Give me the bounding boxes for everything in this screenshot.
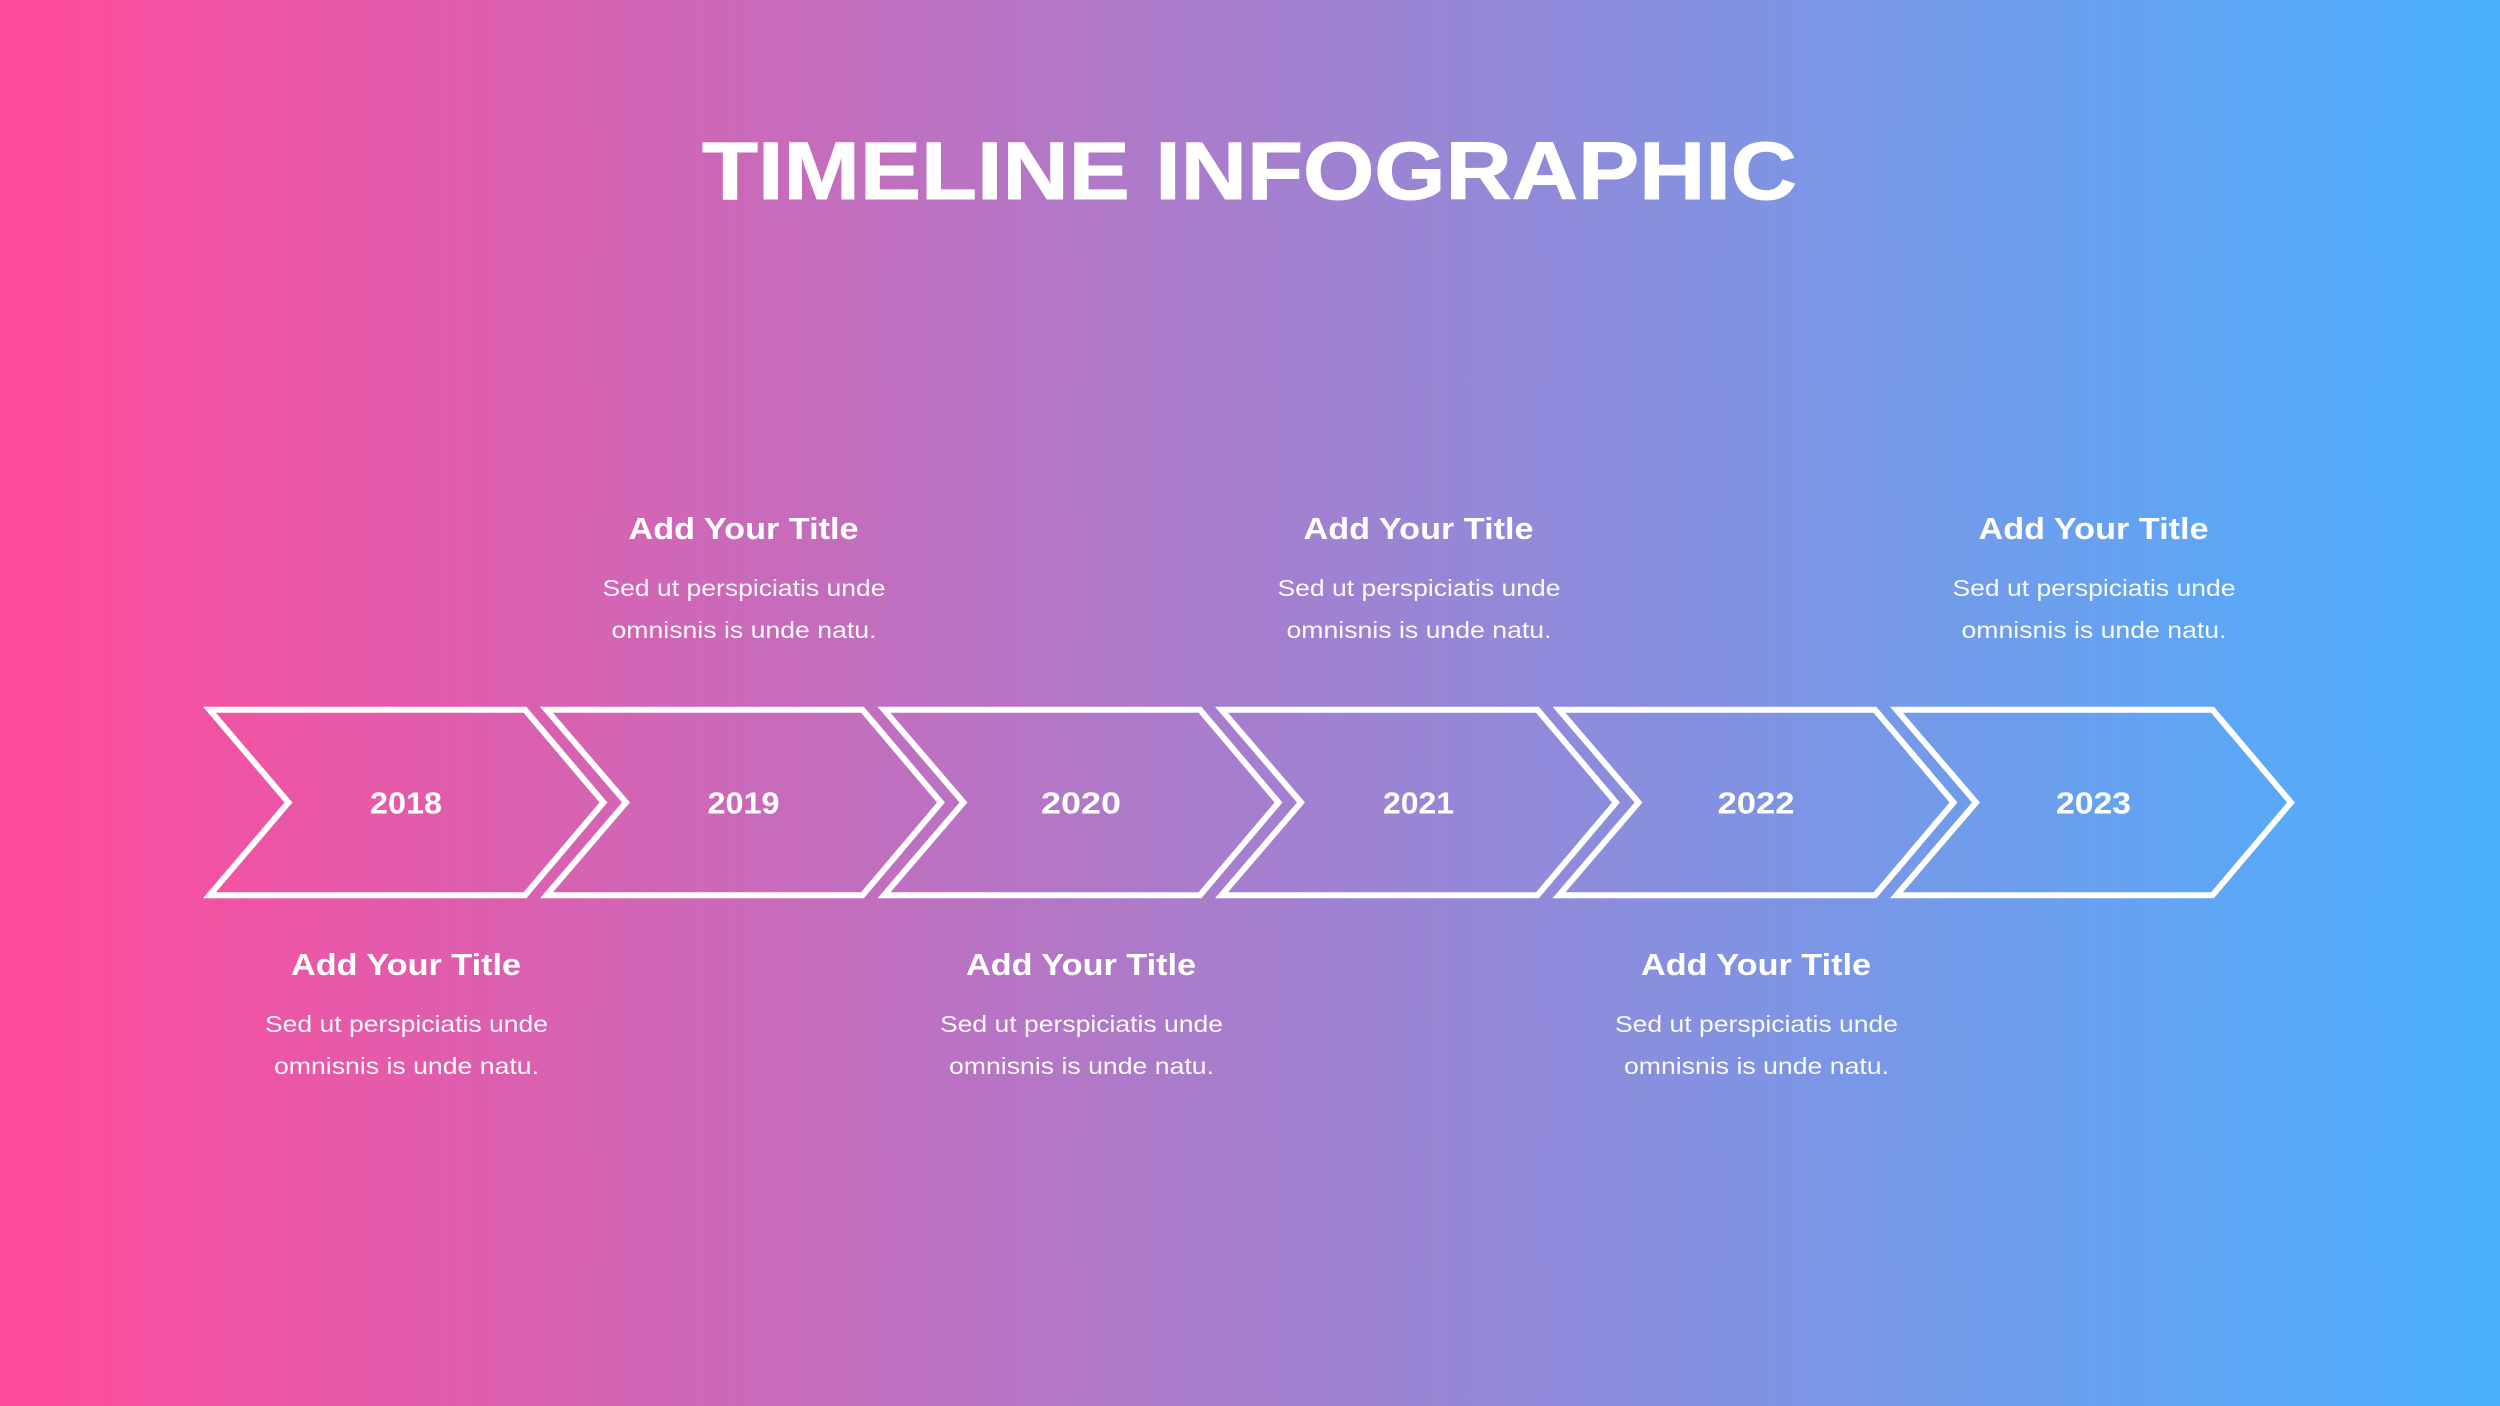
description: 2020 [940, 1011, 1223, 1079]
text block: 2022 [1615, 947, 1898, 1079]
description: 2022 [1615, 1011, 1898, 1079]
timeline step: 2023 [1896, 511, 2291, 895]
text block: 2023 [1952, 511, 2236, 643]
heading: 2019: Add Your Title [628, 511, 858, 546]
heading: 2022: Add Your Title [1641, 947, 1871, 982]
description: 2018: Sed ut perspiciatis unde [265, 1011, 548, 1037]
timeline step: 2020 [884, 710, 1278, 1079]
description: 2021 [1278, 575, 1560, 643]
description: 2022: omnisnis is unde natu. [1624, 1053, 1889, 1079]
arrow: 2022 [1559, 710, 1954, 895]
arrow: 2021 [1222, 710, 1616, 895]
description: 2022: Sed ut perspiciatis unde [1615, 1011, 1898, 1037]
description: 2023: omnisnis is unde natu. [1962, 617, 2226, 643]
text block: 2018 [265, 947, 548, 1079]
description: 2019: omnisnis is unde natu. [612, 617, 876, 643]
description: 2020: Sed ut perspiciatis unde [940, 1011, 1223, 1037]
timeline step: 2021 [1222, 511, 1616, 895]
description: 2021: omnisnis is unde natu. [1286, 617, 1552, 643]
arrow: 2019 [546, 710, 941, 895]
description: 2021: Sed ut perspiciatis unde [1278, 575, 1560, 601]
timeline step: 2018 [210, 710, 604, 1079]
heading: 2018: Add Your Title [291, 947, 521, 982]
arrow: 2018 [210, 710, 604, 895]
timeline step: 2019 [546, 511, 941, 895]
year: 2018: 2018 [370, 786, 442, 820]
description: 2018 [265, 1011, 548, 1079]
text block: 2020 [940, 947, 1223, 1079]
description: 2023: Sed ut perspiciatis unde [1952, 575, 2236, 601]
description: 2018: omnisnis is unde natu. [274, 1053, 539, 1079]
heading: 2023: Add Your Title [1978, 511, 2208, 546]
description: 2020: omnisnis is unde natu. [949, 1053, 1214, 1079]
timeline step: 2022 [1559, 710, 1954, 1079]
title: TIMELINE INFOGRAPHIC [702, 126, 1797, 217]
year: 2022: 2022 [1718, 786, 1794, 820]
year: 2021: 2021 [1383, 786, 1454, 820]
description: 2019: Sed ut perspiciatis unde [602, 575, 886, 601]
text block: 2019 [602, 511, 886, 643]
arrow: 2023 [1896, 710, 2291, 895]
heading: 2021: Add Your Title [1304, 511, 1534, 546]
year: 2019: 2019 [708, 786, 780, 820]
description: 2023 [1952, 575, 2236, 643]
heading: 2020: Add Your Title [966, 947, 1196, 982]
description: 2019 [602, 575, 886, 643]
year: 2023: 2023 [2056, 786, 2131, 820]
arrow: 2020 [884, 710, 1278, 895]
year: 2020: 2020 [1041, 786, 1121, 820]
text block: 2021 [1278, 511, 1560, 643]
